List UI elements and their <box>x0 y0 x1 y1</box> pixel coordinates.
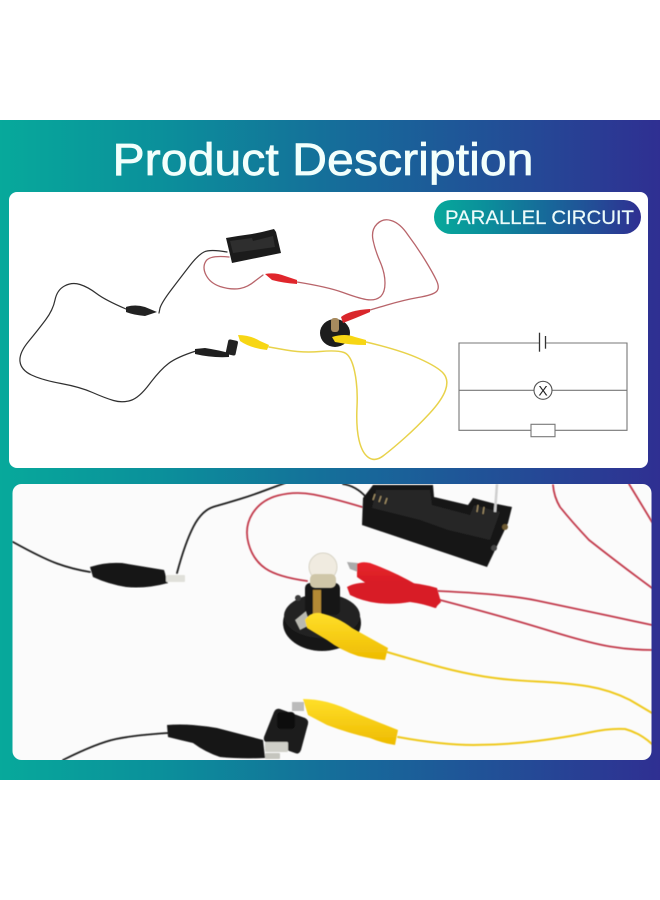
red clip upper <box>265 273 297 284</box>
yellow clip at bulb <box>332 335 366 345</box>
label pill: parallel circuit <box>434 200 641 234</box>
light bulb <box>309 553 337 588</box>
red clip at bulb <box>341 309 370 323</box>
switch small <box>225 339 238 356</box>
black wires close-up <box>13 483 366 760</box>
black clip upper <box>126 306 157 316</box>
yellow wire <box>269 342 447 459</box>
panel: close-up photo <box>12 483 652 760</box>
yellow clip at socket <box>295 611 388 660</box>
black clip left <box>90 563 185 588</box>
lamp symbol: X <box>538 382 548 398</box>
title: Product Description <box>112 134 534 185</box>
circuit diagram <box>459 333 627 437</box>
black wires <box>20 250 227 402</box>
yellow clip lower <box>238 335 269 350</box>
battery holder <box>362 484 512 567</box>
red wires <box>204 220 438 310</box>
battery symbol <box>540 333 546 352</box>
yellow wires close-up <box>387 652 652 745</box>
black clip lower left <box>167 724 265 758</box>
bulb holder small <box>320 318 350 347</box>
panel: parallel circuit photo <box>9 192 648 468</box>
black clip lower <box>195 348 229 357</box>
resistor symbol <box>531 424 555 437</box>
yellow clip lower <box>292 699 398 745</box>
lamp symbol <box>534 381 552 399</box>
red clips <box>347 562 441 608</box>
label pill: parallel circuit: PARALLEL CIRCUIT <box>445 207 634 229</box>
push switch <box>264 709 308 759</box>
bulb socket <box>283 583 361 651</box>
gradient band background <box>0 120 660 780</box>
red wires close-up <box>247 484 652 650</box>
battery holder small <box>226 229 281 263</box>
